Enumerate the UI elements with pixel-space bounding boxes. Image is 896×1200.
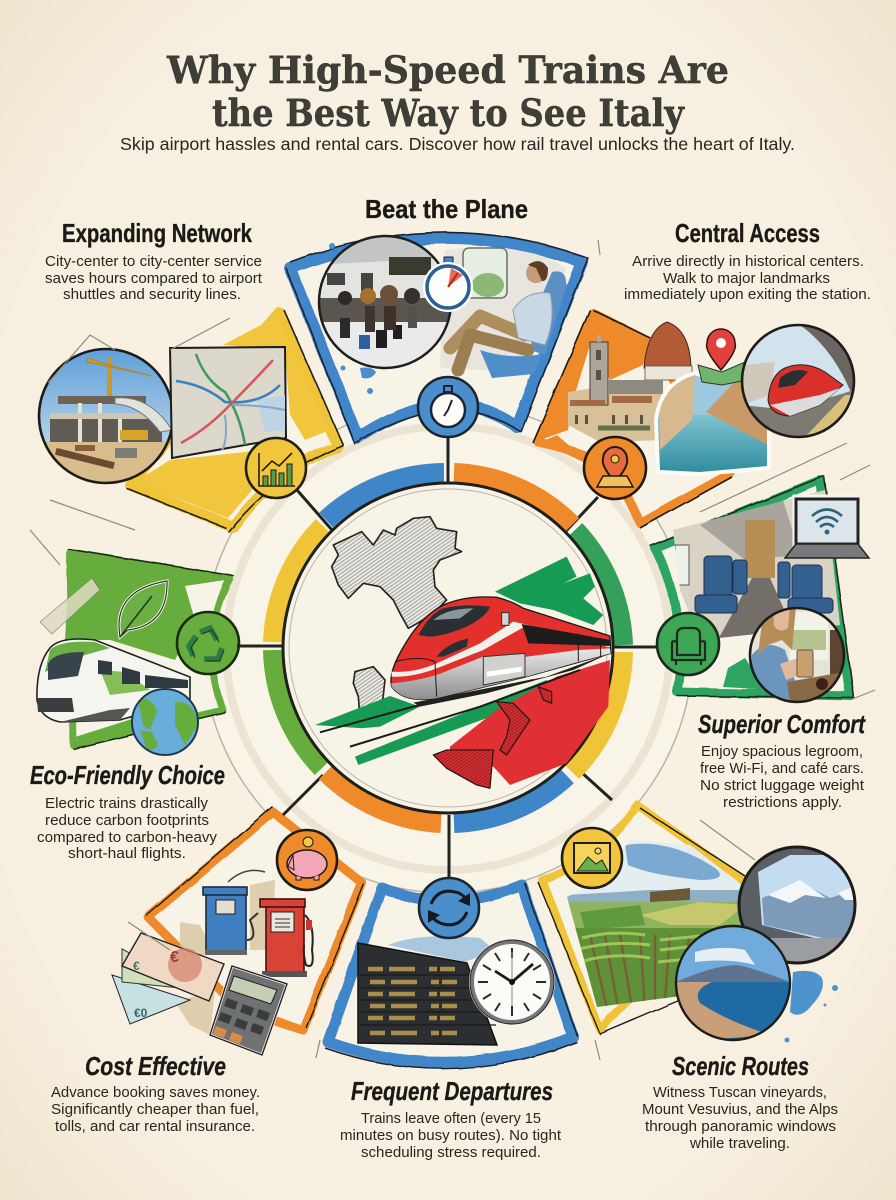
section: scenic routes text: through panoramic windows [645,1118,836,1135]
section: frequent departures text: minutes on busy routes). No tight [340,1127,562,1144]
northern Italy sketch [332,517,462,628]
section: eco-friendly choice text: Electric trains drastically [45,795,208,812]
orange paint [540,315,650,440]
high-speed train [391,597,611,699]
icon: map pin [698,329,747,385]
section: central access text [624,218,871,303]
yellow paint [135,316,330,518]
panel: central access [533,310,854,528]
section: cost effective text: Cost Effective [85,1051,226,1081]
section: expanding network text: Expanding Network [62,218,252,248]
green paint [723,658,775,690]
train circle [742,325,854,437]
section: central access text: Walk to major landmarks [663,270,830,287]
panel: beat the plane [286,232,588,444]
panel: eco-friendly choice [37,549,239,755]
tracks [320,670,580,747]
icon: stopwatch badge [418,377,478,437]
frame [650,476,854,698]
panel: superior comfort [650,476,869,702]
section: cost effective text [51,1051,260,1135]
icon: picture [562,828,622,888]
euro banknotes: € [170,949,179,966]
frame [533,310,732,528]
section: expanding network text: saves hours compared to airport [45,270,263,287]
section: eco-friendly choice text: compared to carbon-heavy [37,829,217,846]
sky wash [388,936,495,962]
panel: cost effective [112,807,364,1055]
section: cost effective text: tolls, and car rental insurance. [55,1118,255,1135]
section: scenic routes text [642,1051,838,1152]
section: scenic routes text: Scenic Routes [672,1051,809,1081]
frame [146,807,364,1030]
calculator [210,966,287,1055]
section: central access text: Arrive directly in historical centers. [632,253,864,270]
section: eco-friendly choice text: short-haul flights. [68,845,186,862]
hub: train over Italy [283,483,613,813]
green flag brush [495,557,603,625]
fuel pumps [203,870,313,977]
construction circle [39,349,173,487]
transit map [170,347,286,458]
outer wheel ring [203,403,693,893]
icon: recycle [177,612,239,674]
euro banknotes [112,933,224,1024]
icon: leaf [119,581,167,637]
central ring of colour arcs [273,473,623,823]
frame [286,232,588,444]
train seat scene [440,247,566,378]
splash [784,971,838,1042]
euro banknotes: € [133,959,140,973]
frame [325,883,577,1069]
section: scenic routes text: Witness Tuscan vineyards, [653,1084,827,1101]
frame [68,549,234,749]
panel: expanding network [39,310,343,532]
frame [126,310,343,532]
loose sketch strokes [30,240,875,1060]
red flag brush [450,660,610,785]
woman with coffee [750,606,844,702]
icon: growth chart [246,438,306,498]
paint stains [175,880,275,1035]
section: superior comfort text [698,709,866,811]
section: expanding network text [45,218,263,303]
section: superior comfort text: No strict luggage weight [700,777,865,794]
section: scenic routes text: while traveling. [689,1135,790,1152]
section: frequent departures text: scheduling stress required. [361,1144,541,1161]
section: eco-friendly choice text: reduce carbon footprints [45,812,209,829]
florence buildings [568,322,692,442]
section: eco-friendly choice text: Eco-Friendly Choice [30,760,225,790]
section: expanding network text: City-center to city-center service [45,253,262,270]
vineyard landscape [567,838,745,1008]
section: frequent departures text [340,1076,562,1161]
subtitle: Skip airport hassles and rental cars. Discover how rail travel unlocks the heart of Italy. [120,134,795,154]
alps window circle [739,847,855,963]
wall clock [469,939,555,1025]
sardinia sketch [353,667,385,718]
title [166,48,729,135]
venice canal [654,371,771,476]
section: superior comfort text: free Wi-Fi, and café cars. [700,760,864,777]
section: frequent departures text: Trains leave often (every 15 [361,1110,541,1127]
splashes [329,243,376,394]
departures board [358,943,497,1045]
green electric train [37,639,190,722]
stopwatch [423,257,473,312]
title: the Best Way to See Italy [212,91,685,135]
section: frequent departures text: Frequent Departures [351,1076,553,1106]
paper tape [40,578,100,634]
section: superior comfort text: Enjoy spacious legroom, [701,743,863,760]
icon: laptop [785,497,869,558]
icon: seat [657,613,719,675]
section: scenic routes text: Mount Vesuvius, and the Alps [642,1101,838,1118]
section: expanding network text: shuttles and security lines. [63,286,241,303]
globe [132,689,198,755]
euro banknotes: €0 [134,1006,148,1020]
section: eco-friendly choice text [30,760,225,862]
section: superior comfort text: restrictions apply. [723,794,842,811]
green paint [65,555,225,660]
section: central access text: immediately upon exiting the station. [624,286,871,303]
section: central access text: Central Access [675,218,820,248]
section: cost effective text: Advance booking saves money. [51,1084,260,1101]
section: beat the plane text: Beat the Plane [365,194,528,224]
title: Why High-Speed Trains Are [166,48,729,92]
frame [538,805,745,1034]
spokes [237,437,658,878]
section: cost effective text: Significantly cheaper than fuel, [51,1101,259,1118]
train interior [673,490,840,638]
icon: piggy bank [277,830,337,890]
airport crowd circle [319,236,451,368]
icon: refresh arrows [419,878,479,938]
panel: frequent departures [325,878,577,1069]
vesuvius circle [676,926,790,1042]
panel: scenic routes [538,805,855,1042]
icon: location badge [584,437,646,499]
